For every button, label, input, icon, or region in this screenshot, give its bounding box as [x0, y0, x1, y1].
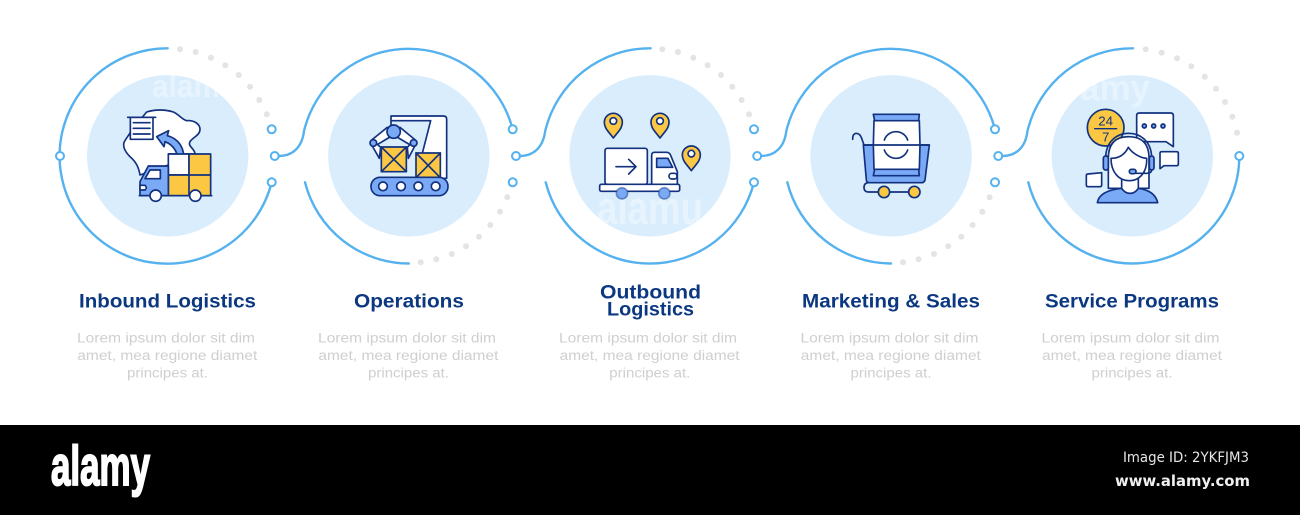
body text 2: principes at.: [368, 365, 449, 380]
disc 3: [569, 75, 731, 236]
step 4: marketing and sales: [761, 49, 1002, 380]
heading 2: Operations: [354, 291, 464, 312]
heading 3: [600, 282, 701, 320]
body text 3: principes at.: [609, 365, 690, 380]
upper arc 5 with connector: [1002, 48, 1133, 156]
disc 4: [810, 75, 972, 236]
ring nodes 2: [509, 125, 520, 186]
step 5: service programs: [1002, 46, 1243, 380]
dotted arc 4: [900, 194, 993, 265]
lower arc 2: [305, 182, 409, 264]
body text 3: amet, mea regione diamet: [560, 348, 740, 363]
upper arc 2 with connector: [279, 49, 513, 156]
disc 5: [1052, 75, 1213, 236]
icon: customer support agent: [1086, 109, 1178, 203]
body text 2: amet, mea regione diamet: [318, 348, 499, 363]
heading 3: Outbound: [600, 282, 701, 304]
ring nodes 4: [991, 125, 1002, 186]
icon: robot arm conveyor: [370, 116, 448, 196]
watermark fragment 5: amy: [1080, 67, 1150, 108]
image id: Image ID: 2YKFJM3: [1123, 450, 1249, 466]
dotted arc 5: [1143, 46, 1240, 136]
dotted arc 2: [418, 194, 510, 265]
body text 4: amet, mea regione diamet: [801, 348, 981, 363]
lower arc 4: [787, 182, 891, 264]
body text 1: amet, mea regione diamet: [77, 348, 258, 363]
body text 4: principes at.: [850, 365, 932, 380]
lower arc 3: [546, 182, 754, 264]
dotted arc 3: [659, 46, 752, 117]
body text 5: principes at.: [1092, 365, 1172, 380]
body text 4: Lorem ipsum dolor sit dim: [800, 331, 978, 346]
heading 3: Logistics: [607, 300, 694, 320]
body text 1: [77, 331, 258, 380]
body text 3: Lorem ipsum dolor sit dim: [559, 331, 737, 346]
upper arc 4 with connector: [761, 49, 995, 156]
website: www.alamy.com: [1115, 472, 1250, 490]
upper arc 3 with connector: [520, 48, 651, 156]
dotted arc 1: [177, 46, 270, 117]
body text 5: [1042, 331, 1222, 380]
ring node 5: [1235, 152, 1243, 160]
body text 4: [800, 331, 981, 380]
body text 2: [318, 331, 499, 380]
body text 3: [559, 331, 740, 380]
ring arc 1: [60, 48, 272, 264]
body text 1: Lorem ipsum dolor sit dim: [77, 331, 255, 346]
icon: customer support agent: 24: [1098, 114, 1114, 129]
step 3: outbound logistics: [520, 46, 761, 380]
black footer band: [0, 425, 1300, 515]
icon: truck with boxes and map: [124, 110, 212, 201]
alamy logo: alamy: [51, 434, 150, 497]
step 2: operations: [279, 49, 520, 380]
watermark fragment 1: alam: [152, 68, 220, 104]
body text 2: Lorem ipsum dolor sit dim: [318, 331, 496, 346]
icon: shopping cart with product bag: [853, 114, 929, 198]
heading 4: Marketing & Sales: [802, 291, 980, 312]
disc 1: [87, 75, 248, 236]
body text 5: Lorem ipsum dolor sit dim: [1042, 331, 1220, 346]
icon: delivery truck with map pins: [600, 113, 700, 199]
disc 2: [328, 75, 489, 236]
body text 5: amet, mea regione diamet: [1042, 348, 1222, 363]
watermark fragment 3: alamu: [597, 182, 703, 234]
lower arc 5: [1028, 156, 1239, 264]
heading 1: Inbound Logistics: [79, 291, 256, 312]
step 1: inbound logistics: [56, 46, 279, 380]
heading 5: Service Programs: [1045, 291, 1219, 312]
icon: customer support agent: 7: [1102, 129, 1109, 144]
ring nodes 1: [56, 125, 279, 186]
ring nodes 3: [750, 125, 761, 186]
body text 1: principes at.: [127, 365, 208, 380]
